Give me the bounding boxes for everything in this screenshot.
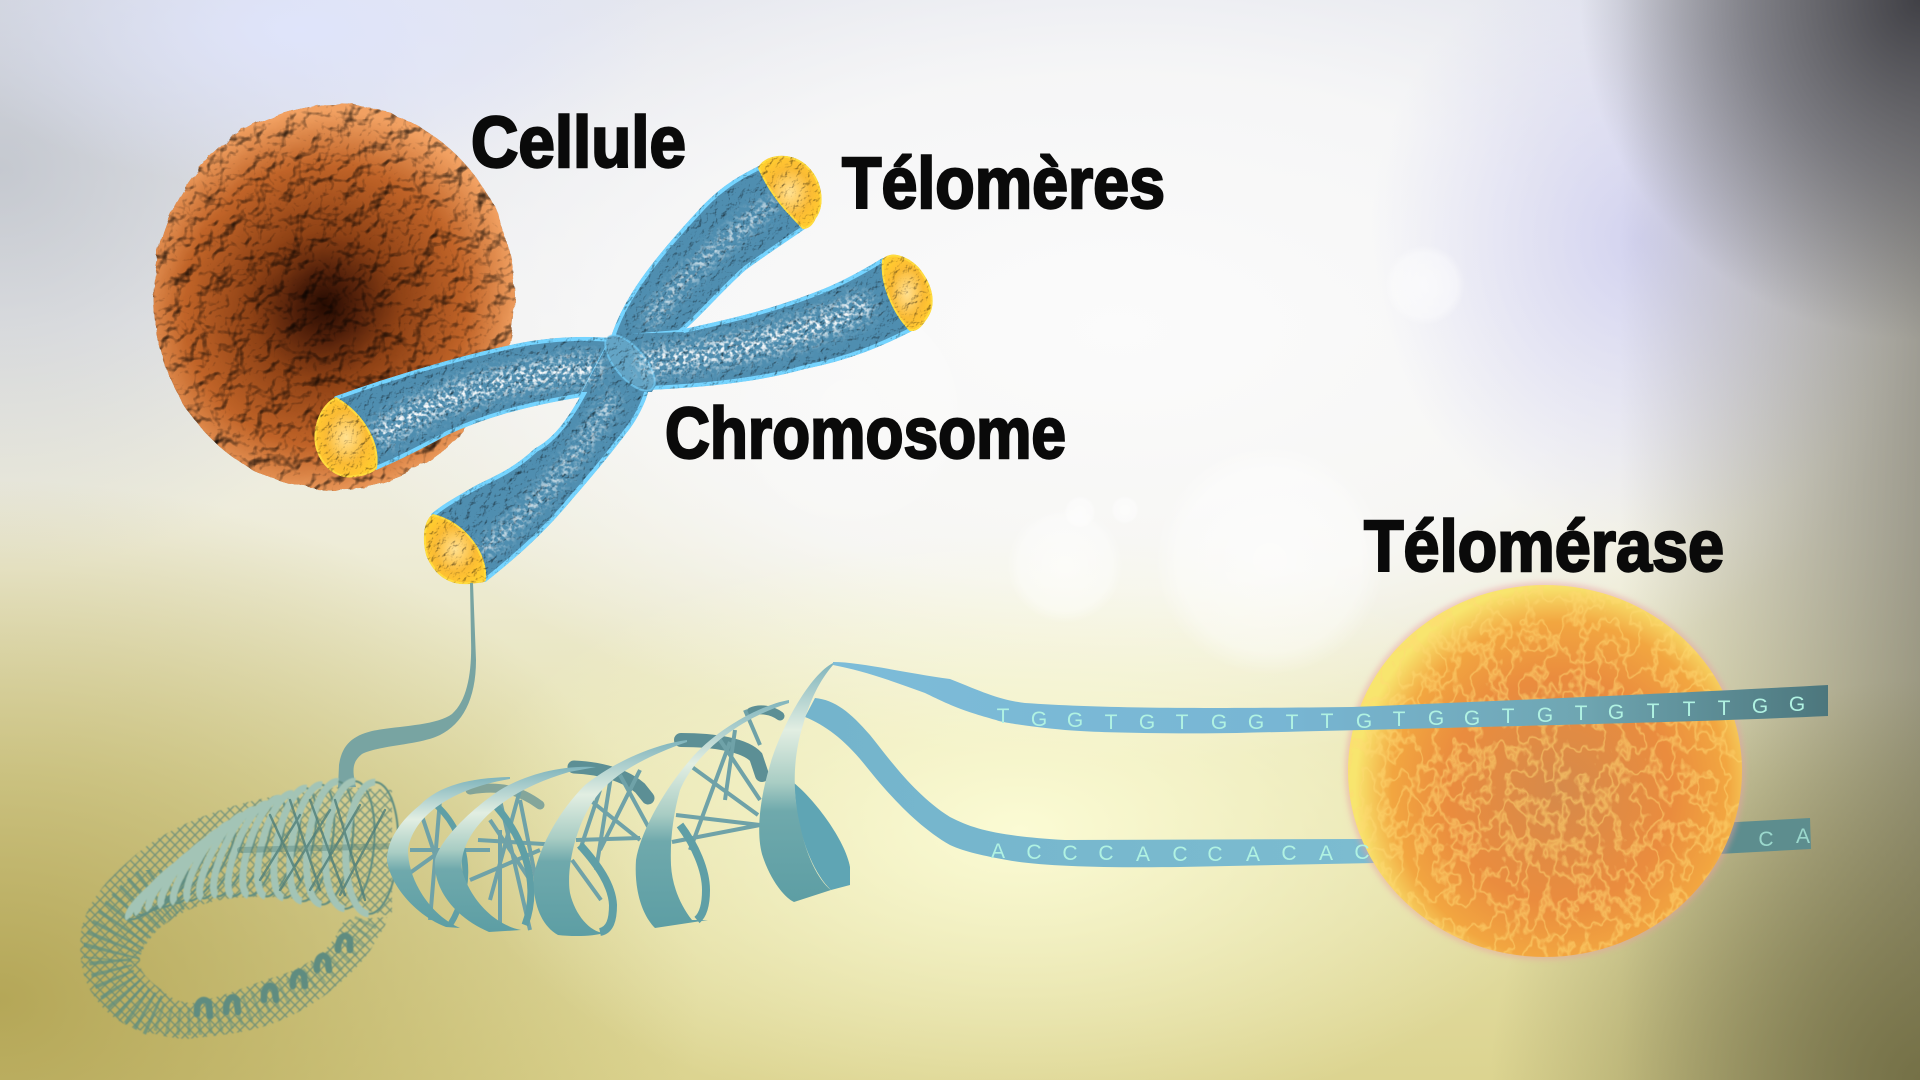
- struts: [400, 710, 760, 930]
- tube lattice body: [80, 787, 392, 1039]
- chromosome speckled highlights: [385, 205, 860, 550]
- DNA upper strand letters: TGGTGTGGTTGTGGTGTGTTTGG: [997, 693, 1805, 734]
- fine ring bands around bend: [110, 884, 368, 1022]
- chromosome: [315, 157, 932, 583]
- DNA large ribbon turns: [387, 662, 1828, 936]
- tube rings: [123, 779, 401, 925]
- DNA coil: distant part: [80, 779, 401, 1039]
- turn 1 front: [759, 663, 833, 902]
- small hoops of the tail: [197, 936, 350, 1016]
- turn 4: [435, 767, 596, 932]
- telomerase sphere: [1345, 582, 1745, 960]
- back bands of turns: [430, 800, 706, 932]
- DNA lower strand right end: [1700, 818, 1811, 855]
- turn 2: [636, 700, 789, 928]
- DNA lower strand letters: [991, 825, 1810, 866]
- turn 3: [534, 740, 687, 936]
- DNA lower strand: [805, 698, 1375, 867]
- connector ribbon from chromosome to DNA: [338, 583, 476, 788]
- DNA upper strand: [833, 662, 1828, 733]
- label: Télomères: Télomères: [842, 144, 1165, 224]
- cell: [153, 104, 515, 490]
- turn 5: [387, 777, 510, 928]
- chromosome arms: [336, 168, 910, 580]
- telomere caps: [315, 157, 932, 583]
- backing arcs: [470, 710, 780, 805]
- DNA lower strand letters: CA: [1758, 825, 1810, 851]
- label: Cellule: Cellule: [471, 103, 686, 183]
- tube darker struts: [240, 800, 400, 900]
- DNA lower strand letters: ACCCACCACAC: [991, 840, 1370, 866]
- turn 1 back: [794, 783, 850, 890]
- label: Chromosome: Chromosome: [665, 394, 1066, 474]
- label: Télomérase: Télomérase: [1364, 507, 1724, 587]
